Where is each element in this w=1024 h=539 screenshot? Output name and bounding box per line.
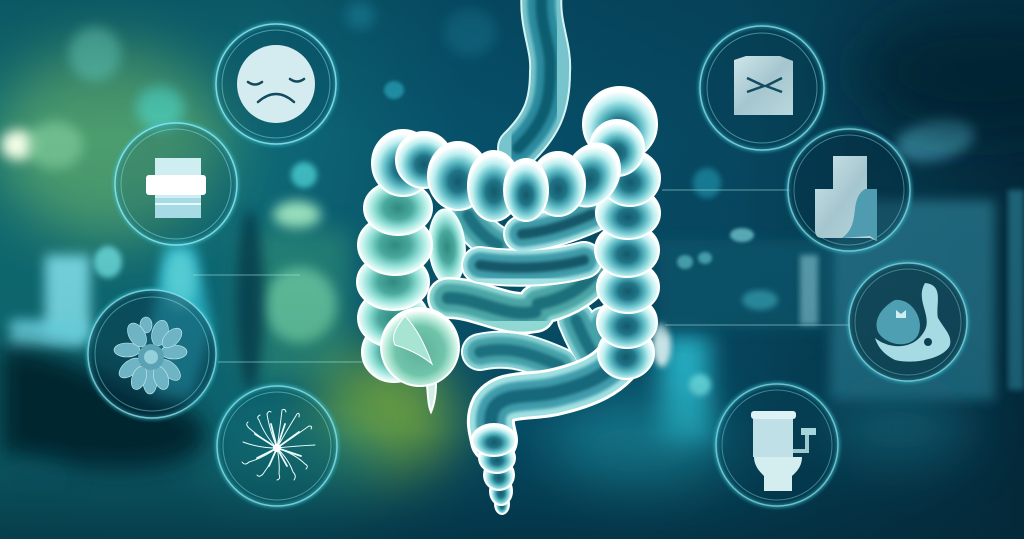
ring glows	[88, 24, 967, 506]
connector lines	[193, 190, 850, 362]
back loops	[468, 215, 609, 366]
ascending colon	[357, 181, 432, 382]
icon: toilet roll	[115, 123, 237, 245]
middle loops	[448, 275, 592, 313]
left loop	[426, 208, 468, 286]
stomach tube	[518, 0, 550, 148]
icon: sad face	[216, 24, 336, 144]
icon: blocked box	[700, 26, 824, 150]
cecum and appendix	[381, 308, 459, 412]
small intestine	[426, 208, 609, 366]
icon: bacteria burst	[217, 386, 337, 506]
transverse colon	[372, 87, 657, 221]
icon: toilet	[716, 384, 838, 506]
icon: stomach pipe	[788, 129, 910, 251]
large intestine	[357, 87, 660, 514]
descending colon	[595, 150, 660, 379]
sigmoid colon	[491, 350, 625, 440]
rectum taper	[472, 424, 516, 514]
icon: organ	[849, 263, 967, 381]
front loops	[480, 214, 592, 268]
icon: flower	[88, 290, 216, 418]
